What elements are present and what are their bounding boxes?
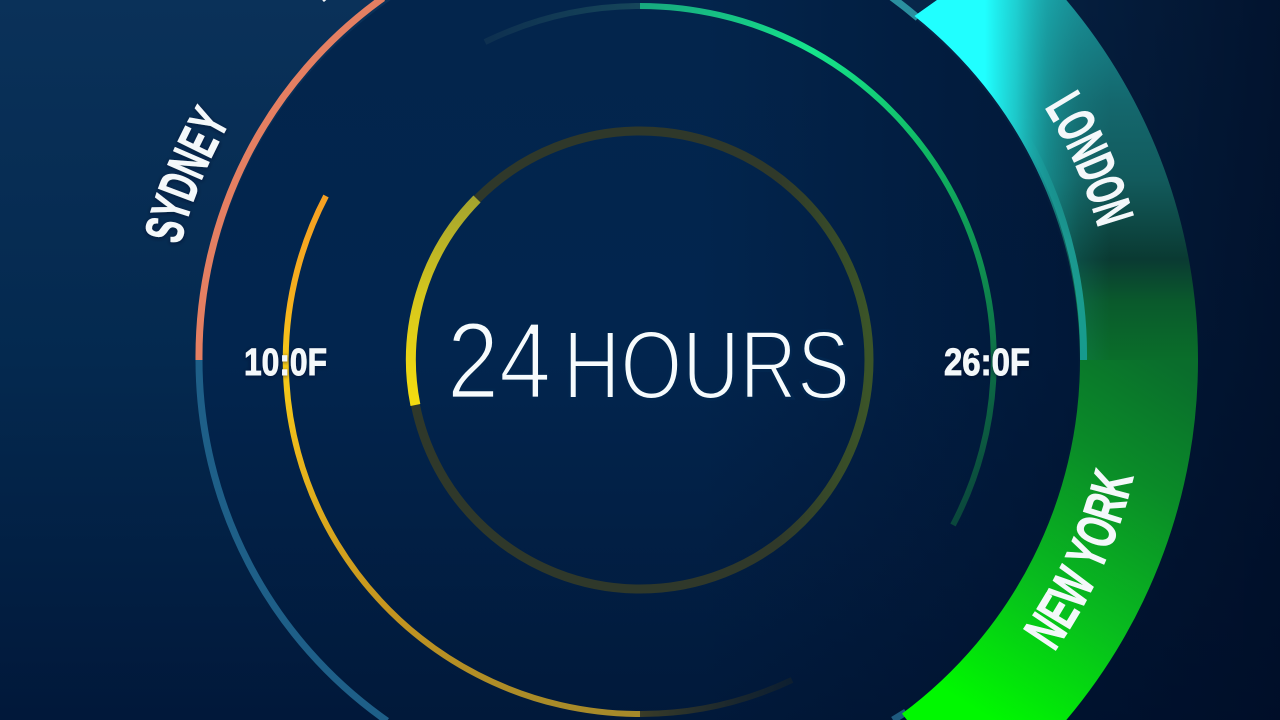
outer ring: Sydney salmon segment	[199, 0, 383, 360]
middle ring: faded arc at top	[485, 6, 640, 42]
inner ring: yellow arc	[411, 199, 477, 405]
title: 24 HOURS	[447, 300, 850, 422]
band inner teal rim	[1000, 96, 1084, 360]
label: New York: NEW YORK	[1023, 467, 1134, 651]
label: Sydney: SYDNEY	[145, 103, 227, 244]
outer ring: blue segment	[199, 360, 387, 720]
inner ring: olive track	[411, 131, 869, 589]
outer ring: teal piece at top	[890, 0, 918, 18]
title: 24 HOURS: HOURS	[563, 310, 850, 420]
middle ring: faded arc at bottom	[640, 680, 792, 714]
middle ring: orange-yellow arc	[286, 196, 640, 714]
band: London segment	[914, 0, 1198, 360]
time label: left: 10:0F	[244, 342, 327, 384]
title: 24 HOURS: 24	[447, 300, 551, 422]
outer ring: small blue piece beside New York band	[893, 712, 906, 720]
label: London: LONDON	[1045, 89, 1134, 227]
band: New York segment	[902, 360, 1198, 720]
middle ring: green arc	[640, 6, 994, 525]
time label: right: 26:0F	[944, 342, 1030, 384]
